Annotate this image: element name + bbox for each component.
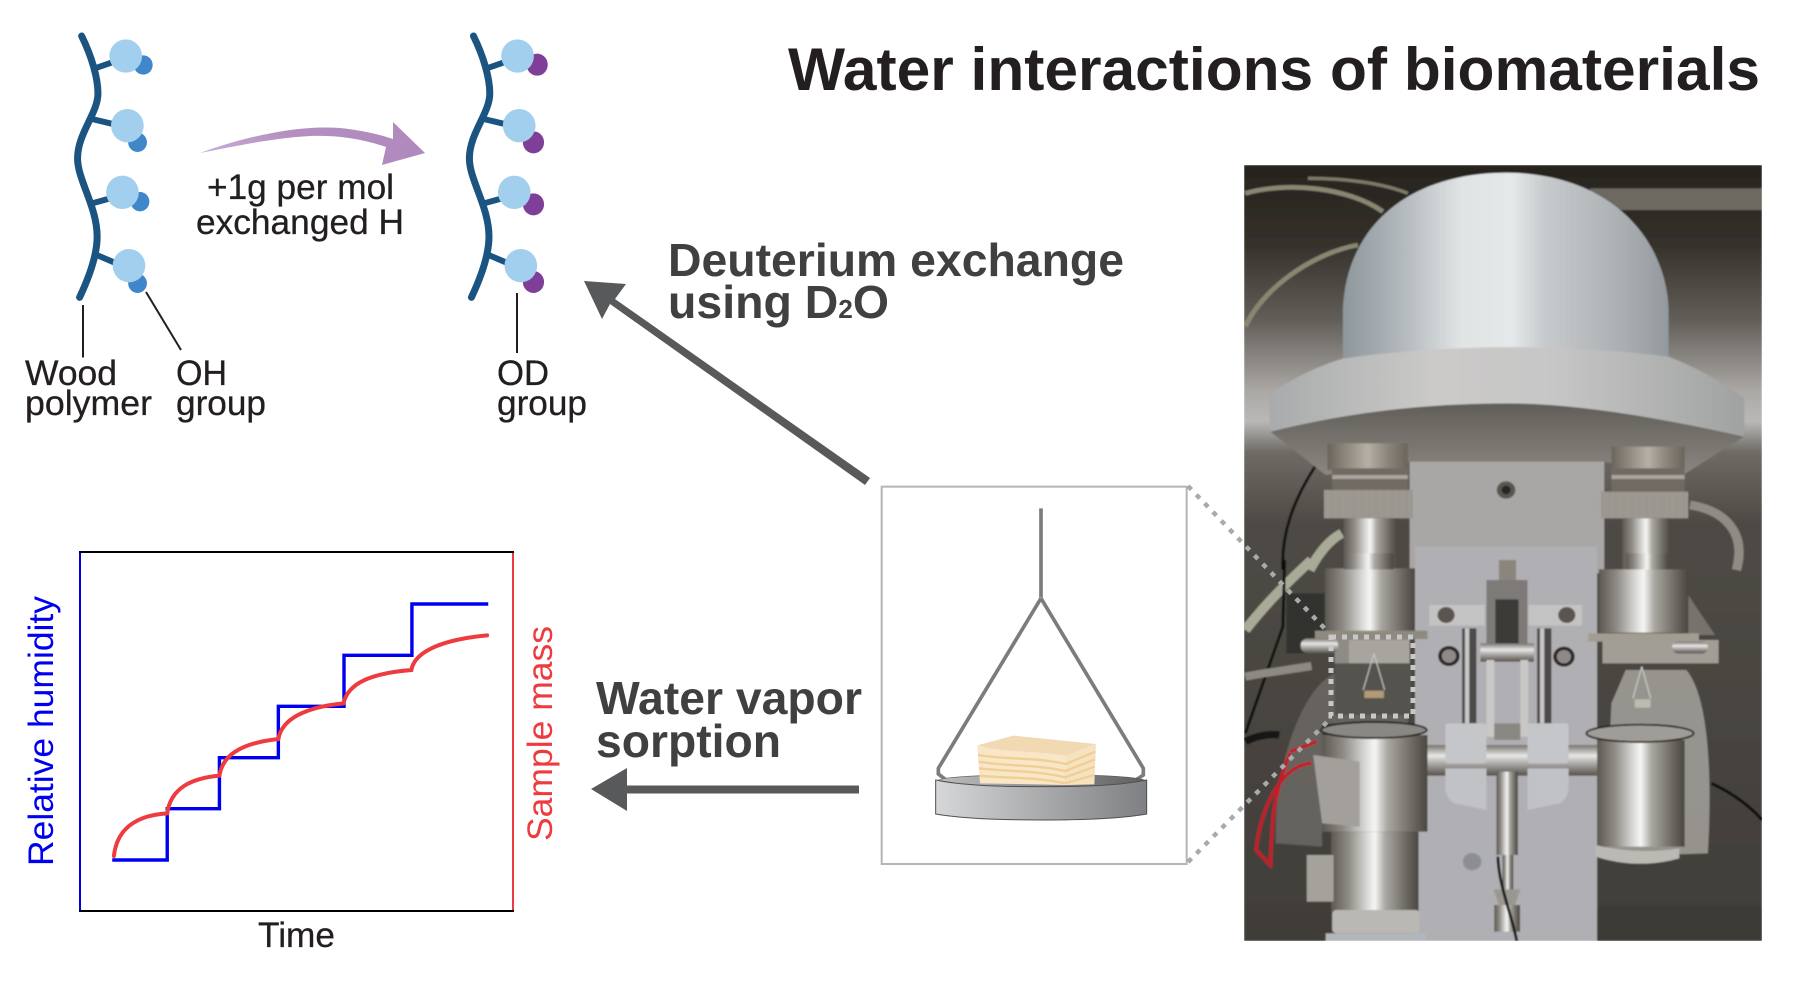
oxygen atoms [498,39,537,282]
label: OH group: group [176,384,266,423]
sample mass curve [114,635,487,856]
central guides and bracket [1462,628,1476,723]
upper photo: dome and columns [1245,173,1762,573]
polymer backbone [78,36,98,297]
photo background [1244,165,1762,941]
dotted connectors [1188,486,1329,862]
lower photo: balance and sample tubes [1245,547,1762,941]
label: OD group: OD [497,354,549,393]
heading: Deuterium exchange: Deuterium exchange [668,234,1124,286]
label: mass change: +1g per mol [207,168,394,207]
pan tray [936,775,1147,787]
label: OH group [176,354,266,423]
arrow: water vapor sorption [591,768,859,811]
heading: Water vapor sorption [596,672,862,767]
chart: sorption isotherm steps [79,552,514,911]
label: OD group [497,354,587,423]
polymer backbone [469,36,490,297]
diagram: OH polymer chain [78,36,153,297]
heading: Deuterium exchange [668,234,1124,328]
right sample collar [1602,640,1719,663]
label: mass change [196,168,404,242]
label: Wood polymer [25,354,152,423]
central cross tube and clamps [1426,745,1601,776]
leader lines [83,292,517,358]
OH hydrogen atoms [128,55,153,293]
heading: Deuterium exchange: using D2O [668,276,889,328]
label: OD group: group [497,384,587,423]
axis label: Relative humidity: Relative humidity [22,595,61,866]
relative humidity step line [112,604,488,860]
heading: Water vapor sorption: sorption [596,715,781,767]
left sample collar [1335,639,1410,664]
oxygen atoms [106,39,145,282]
dotted inset: sample location in photo [1331,637,1413,716]
OD deuterium atoms [523,54,548,293]
diagram: OD polymer chain [469,36,548,297]
hanging wire [938,508,1143,782]
red wires [1256,742,1317,865]
label: mass change: exchanged H [196,203,404,242]
axis label: Sample mass: Sample mass [521,626,560,841]
pan side [936,780,1147,820]
wood sample [977,736,1096,785]
side branches [90,62,116,263]
panel: sample pan close-up [882,487,1187,864]
right tube [1597,740,1685,847]
axis label: Time: Time [258,916,335,955]
arrow: deuterium exchange [584,281,870,485]
arrow: H to D exchange [200,122,425,165]
photo: sorption instrument [1244,165,1762,941]
label: OH group: OH [176,354,227,393]
title: Water interactions of biomaterials [788,35,1760,103]
left tube [1322,735,1427,832]
label: Wood polymer: polymer [25,384,152,423]
glass bottles [1276,673,1408,847]
panel frame [882,487,1187,864]
side branches [482,62,508,263]
heading: Water vapor sorption: Water vapor [596,672,862,724]
label: Wood polymer: Wood [25,354,117,393]
upper cylinders [1325,568,1415,632]
chart axes [79,552,514,911]
